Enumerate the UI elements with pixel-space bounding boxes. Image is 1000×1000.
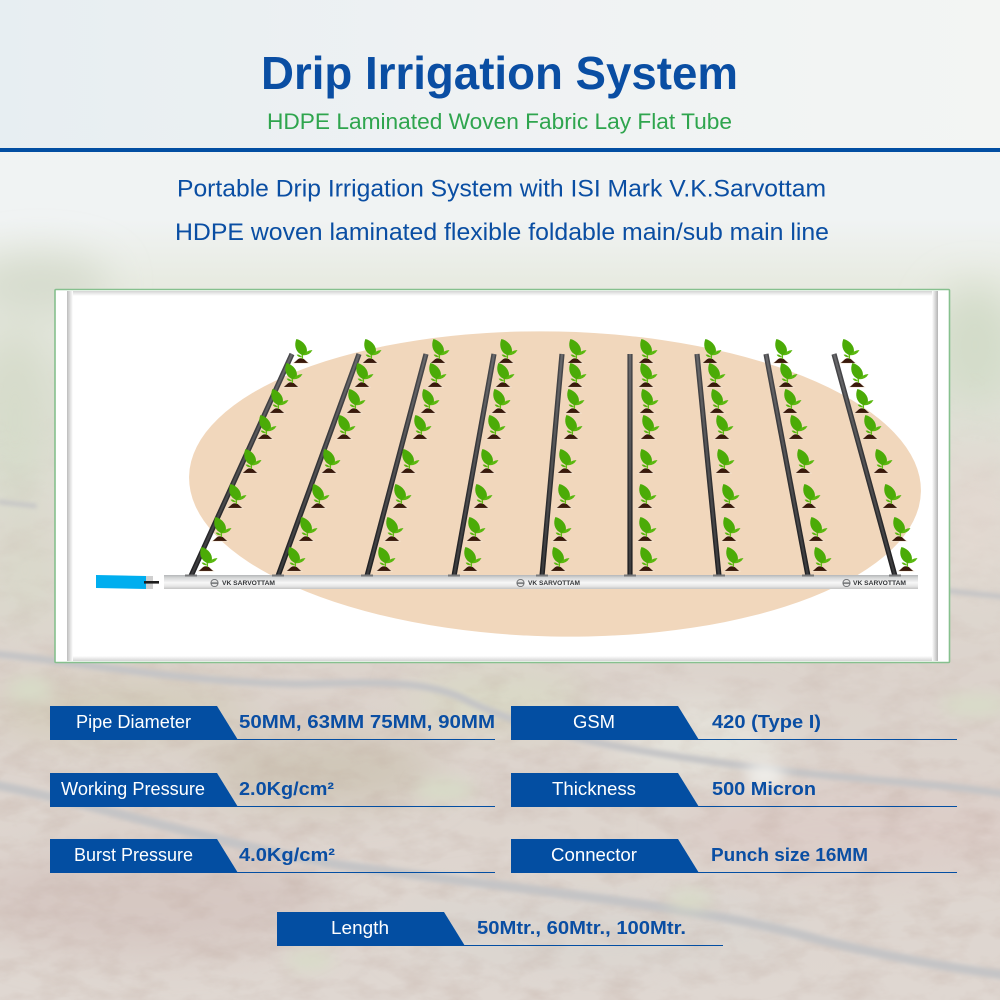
spec: Thickness: Thickness: [552, 779, 636, 799]
plants row 9: [840, 339, 918, 571]
plants row 7: [702, 339, 744, 571]
main lay flat pipe: VK SARVOTTAM: [222, 580, 276, 587]
spec: GSM: GSM: [573, 712, 615, 732]
spec: Burst Pressure: Burst Pressure: [74, 845, 193, 865]
spec: Connector: Punch size 16MM: [711, 845, 868, 865]
main lay flat pipe: [164, 574, 918, 589]
soil ellipse: [186, 324, 924, 644]
lateral drip pipes: [191, 354, 895, 576]
spec: Pipe Diameter: Pipe Diameter: [76, 712, 191, 732]
description lines: HDPE woven laminated flexible foldable main/sub main line: [175, 219, 829, 246]
plants row 2: [286, 339, 382, 571]
plants row 4: [462, 339, 518, 571]
spec: Length: 50Mtr., 60Mtr., 100Mtr.: [477, 918, 686, 938]
blue inlet connector: [96, 575, 159, 589]
spec: GSM: [511, 706, 957, 740]
spec: Connector: Connector: [551, 845, 637, 865]
spec: Working Pressure: 2.0Kg/cm²: [239, 779, 334, 799]
spec: Thickness: [511, 773, 957, 807]
title: Drip Irrigation System: [261, 47, 738, 99]
spec: Burst Pressure: 4.0Kg/cm²: [239, 845, 335, 865]
spec: GSM: 420 (Type I): [712, 712, 821, 732]
spec: Burst Pressure: [50, 839, 495, 873]
spec: Connector: [511, 839, 957, 873]
description lines: Portable Drip Irrigation System with ISI Mark V.K.Sarvottam: [177, 176, 826, 202]
main lay flat pipe: VK SARVOTTAM: [528, 580, 580, 587]
spec: Pipe Diameter: [50, 706, 495, 740]
spec: Length: Length: [331, 918, 389, 938]
description lines: [175, 176, 829, 246]
panel: drip layout diagram: [55, 290, 950, 662]
header band: [0, 0, 1000, 148]
plants row 5: [550, 339, 586, 571]
plants row 1: [198, 339, 312, 571]
main lay flat pipe: VK SARVOTTAM: [853, 580, 906, 587]
subtitle: HDPE Laminated Woven Fabric Lay Flat Tube: [267, 109, 732, 134]
spec: Length: [277, 912, 723, 946]
plants row 3: [376, 339, 450, 571]
spec: Thickness: 500 Micron: [712, 779, 816, 799]
spec: Working Pressure: Working Pressure: [61, 779, 205, 799]
header rule: [0, 148, 1000, 152]
spec: Pipe Diameter: 50MM, 63MM 75MM, 90MM: [239, 712, 495, 732]
spec: Working Pressure: [50, 773, 495, 807]
plants row 8: [772, 339, 832, 571]
plants row 6: [636, 339, 660, 571]
